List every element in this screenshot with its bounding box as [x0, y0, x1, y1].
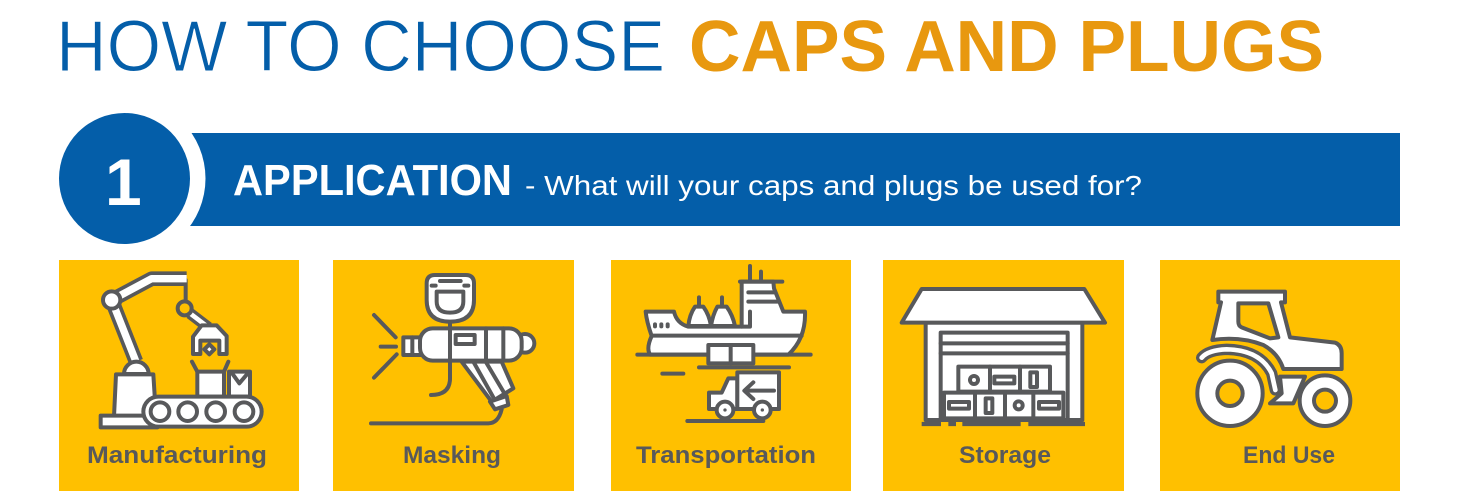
label: manufacturing: Manufacturing [87, 442, 267, 469]
panel: storage [883, 260, 1124, 491]
panel: masking [333, 260, 574, 491]
icon: tractor [1197, 292, 1350, 426]
panel: transportation [611, 260, 851, 491]
label: storage: Storage [959, 442, 1051, 469]
title [56, 7, 1324, 87]
label: masking: Masking [403, 442, 501, 469]
section header: application: - What will your caps and plugs be used for? [525, 170, 1142, 201]
label: end use: End Use [1243, 442, 1335, 469]
icon: spray gun [371, 275, 534, 423]
icon: ship and truck [637, 266, 811, 421]
icon: robot arm and conveyor [101, 279, 262, 427]
title: HOW TO CHOOSE [56, 7, 665, 87]
icon: warehouse [902, 289, 1105, 424]
section header: application: APPLICATION [233, 156, 512, 205]
section header: application [44, 98, 1400, 260]
section header: application: 1 [105, 145, 142, 219]
label: transportation: Transportation [636, 442, 816, 469]
panel: manufacturing [59, 260, 299, 491]
title: CAPS AND PLUGS [689, 7, 1324, 87]
panel: end use [1160, 260, 1400, 491]
